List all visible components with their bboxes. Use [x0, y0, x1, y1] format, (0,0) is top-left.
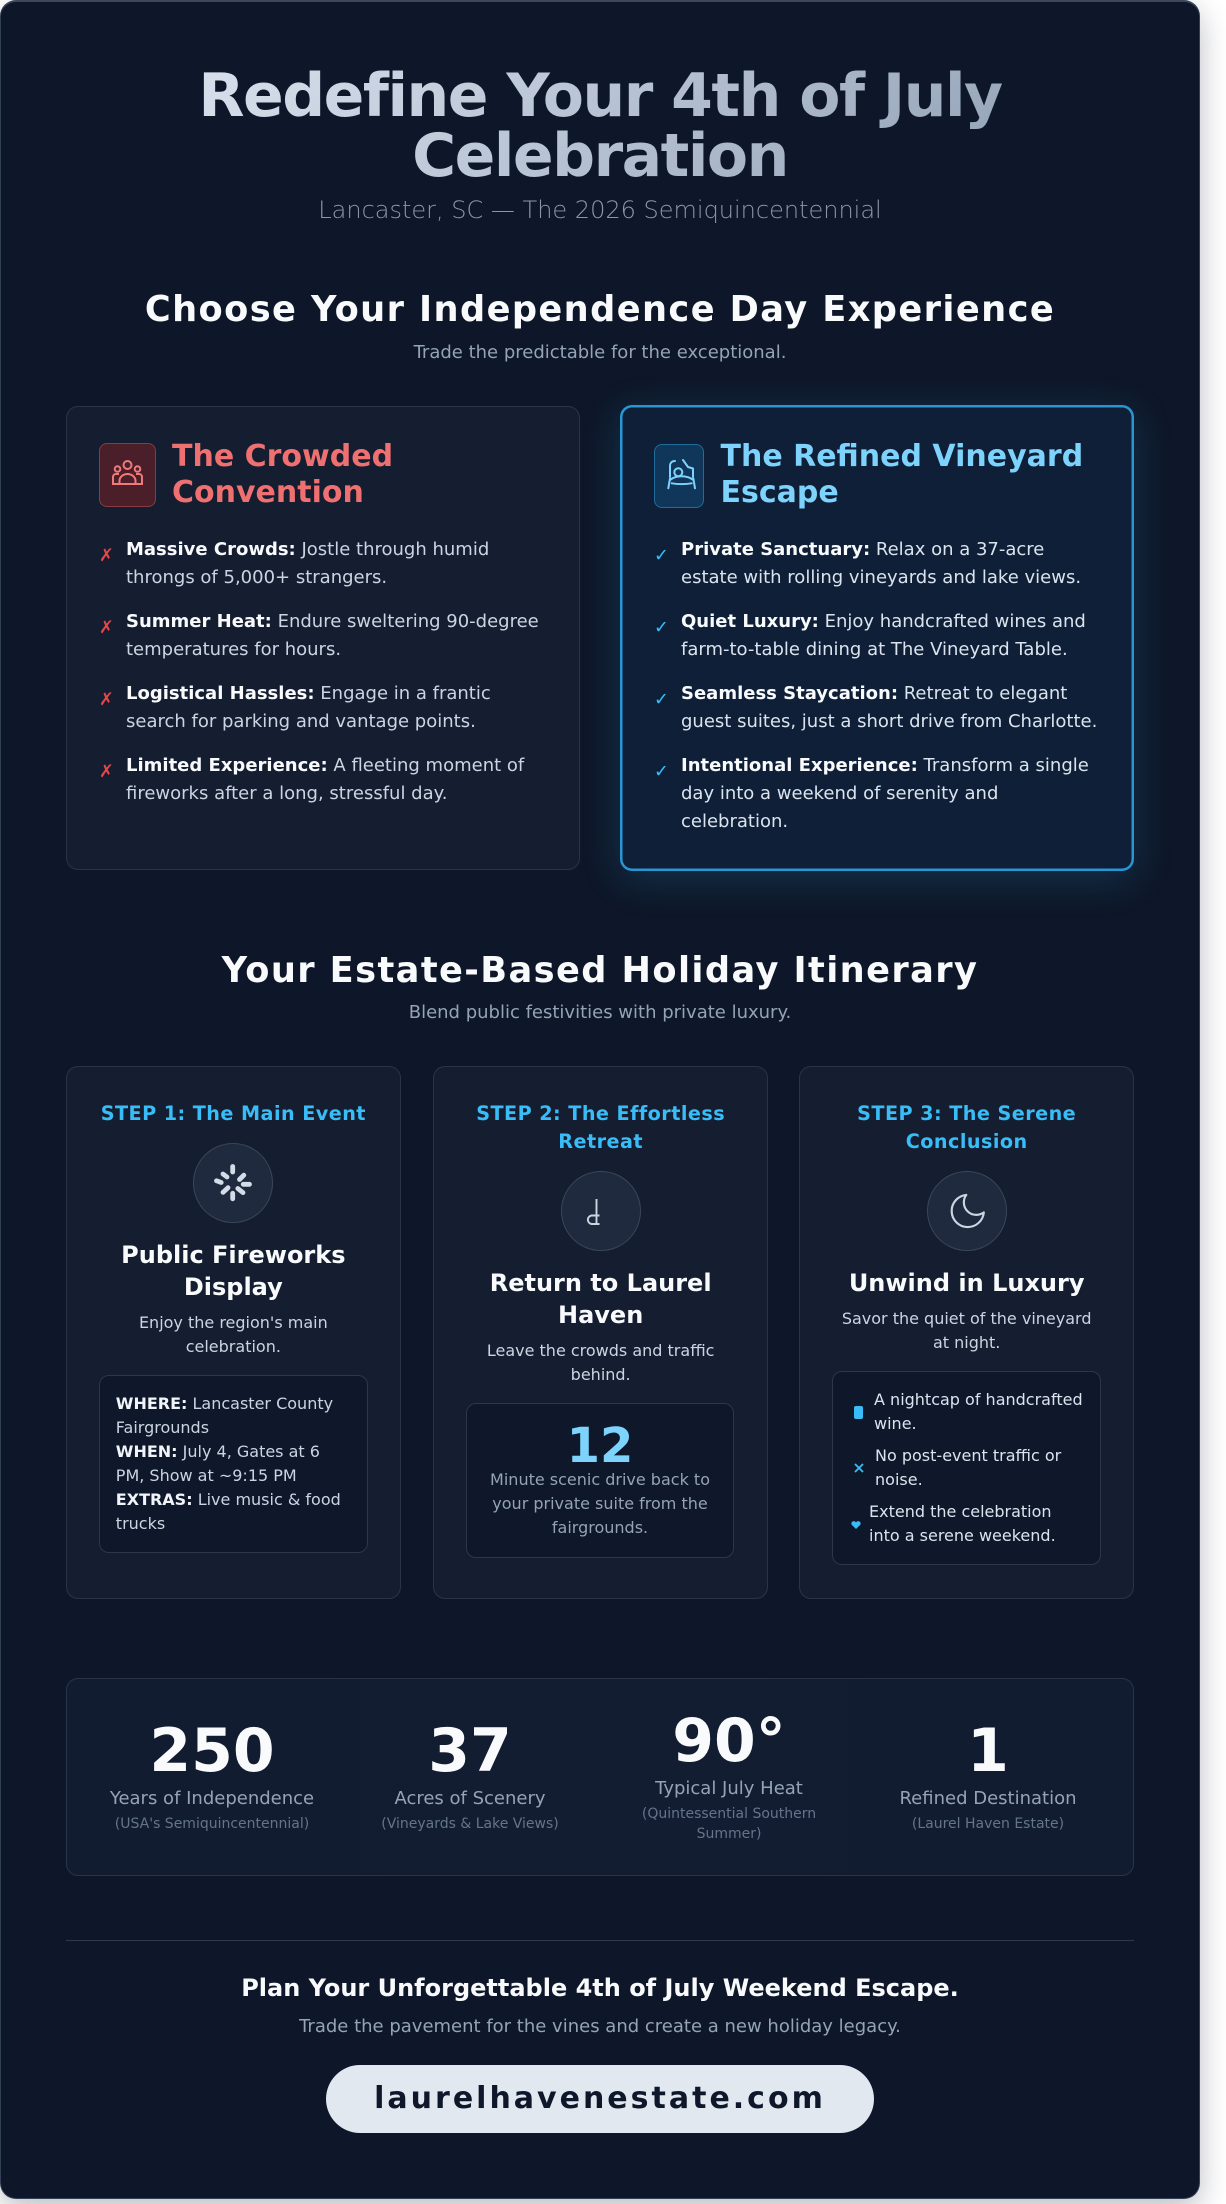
panel: refined vineyard escape — [620, 405, 1134, 871]
item: no traffic: noise. — [875, 1470, 923, 1489]
step 2 title: Return to Laurel — [490, 1269, 712, 1297]
step 3 label — [857, 1102, 1076, 1152]
heading: itinerary: Your Estate-Based Holiday Itinerary — [222, 950, 978, 991]
details text: PM, Show at ~9:15 PM — [116, 1466, 297, 1485]
stat: 12: 12 — [567, 1418, 633, 1474]
stat caption: fairgrounds. — [552, 1518, 648, 1537]
step 2 label: Retreat — [558, 1130, 643, 1152]
panel: step 1 — [66, 1066, 401, 1598]
step 2 description — [487, 1341, 714, 1384]
stat caption — [490, 1470, 710, 1537]
subheading: choose your experience: Trade the predictable for the exceptional. — [414, 342, 786, 363]
check marks — [654, 546, 669, 782]
heading: crowded convention: The Crowded — [172, 439, 393, 474]
stats panel — [66, 1678, 1134, 1876]
step 1 description — [139, 1313, 328, 1356]
step 2 title — [490, 1269, 712, 1329]
call to action heading: Plan Your Unforgettable 4th of July Weekend Escape. — [241, 1974, 959, 2002]
title: Redefine Your 4th of July — [198, 61, 1002, 131]
cross marks: ✗ — [99, 618, 114, 638]
step 2 stat box — [466, 1403, 734, 1558]
step 3 description — [842, 1308, 1091, 1352]
stats panel: Years of Independence — [110, 1788, 314, 1809]
details text: WHERE: Lancaster County — [116, 1394, 333, 1413]
subtitle: Lancaster, SC — The 2026 Semiquincentennial — [318, 196, 882, 224]
website pill — [326, 2065, 874, 2133]
item: no traffic — [875, 1446, 1062, 1489]
details text: EXTRAS: Live music & food — [116, 1490, 341, 1509]
check marks: ✓ — [654, 546, 669, 566]
step 1 title — [121, 1241, 346, 1301]
cross marks — [99, 546, 114, 782]
step 1 description: celebration. — [186, 1337, 281, 1356]
details text: Fairgrounds — [116, 1418, 209, 1437]
heading: refined vineyard escape: The Refined Vineyard — [720, 439, 1083, 474]
list item: summer heat — [126, 610, 539, 660]
list item: intentional experience: day into a weekend of serenity and — [681, 783, 998, 804]
step 3 list box — [832, 1371, 1101, 1565]
item: extend celebration: Extend the celebration — [869, 1502, 1052, 1521]
step 1 title: Display — [184, 1273, 283, 1301]
stats panel: Refined Destination — [899, 1788, 1077, 1809]
subheading: itinerary: Blend public festivities with private luxury. — [409, 1002, 791, 1022]
step 1 details box — [99, 1375, 368, 1552]
step 2 description: behind. — [571, 1365, 631, 1384]
list item: summer heat: Summer Heat: Endure sweltering 90-degree — [126, 610, 539, 632]
details text — [116, 1394, 341, 1533]
check marks: ✓ — [654, 762, 669, 782]
call to action subtext: Trade the pavement for the vines and create a new holiday legacy. — [299, 2016, 901, 2037]
step 3 description: Savor the quiet of the vineyard — [842, 1308, 1091, 1328]
details text: WHEN: July 4, Gates at 6 — [116, 1442, 320, 1461]
step 2 label — [476, 1102, 725, 1152]
icon: fireworks — [193, 1143, 273, 1223]
stats panel: Typical July Heat — [655, 1778, 803, 1799]
list item: private sanctuary — [681, 539, 1081, 588]
icon: heart — [851, 1521, 861, 1529]
step 3 label: Conclusion — [906, 1130, 1028, 1152]
stats panel: (Quintessential Southern — [642, 1806, 816, 1822]
step 2 description: Leave the crowds and traffic — [487, 1341, 714, 1360]
list item: limited experience: fireworks after a long, stressful day. — [126, 783, 447, 804]
step 1 title: Public Fireworks — [121, 1241, 346, 1269]
list item: summer heat: temperatures for hours. — [126, 639, 341, 660]
panel: step 3 — [799, 1066, 1134, 1598]
list item: massive crowds — [126, 538, 489, 588]
heading: crowded convention: Convention — [172, 475, 364, 510]
list item: seamless staycation: guest suites, just a short drive from Charlotte. — [681, 711, 1097, 732]
stat: 37 acres — [381, 1716, 559, 1832]
stat: 250 years — [110, 1716, 314, 1832]
title — [198, 61, 1002, 191]
stats panel: Summer) — [697, 1826, 761, 1842]
step 1 description: Enjoy the region's main — [139, 1313, 328, 1332]
stat caption: Minute scenic drive back to — [490, 1470, 710, 1489]
list item: quiet luxury: farm-to-table dining at The Vineyard Table. — [681, 639, 1068, 660]
icon: wine glyph — [854, 1406, 863, 1419]
list item: seamless staycation: Seamless Staycation: Retreat to elegant — [681, 683, 1067, 704]
list item: intentional experience: Intentional Experience: Transform a single — [681, 755, 1089, 776]
cross marks: ✗ — [99, 762, 114, 782]
check marks: ✓ — [654, 618, 669, 638]
step 3 title: Unwind in Luxury — [849, 1269, 1084, 1297]
cross marks: ✗ — [99, 690, 114, 710]
icon: armchair — [654, 444, 704, 508]
icon: crowd — [99, 443, 156, 507]
icon: no traffic cross — [854, 1463, 864, 1473]
list item: intentional experience: celebration. — [681, 811, 788, 832]
check marks: ✓ — [654, 690, 669, 710]
website pill: laurelhavenestate.com — [374, 2081, 826, 2116]
item: nightcap: wine. — [874, 1414, 917, 1433]
heading: choose your experience: Choose Your Independence Day Experience — [145, 289, 1055, 330]
list item: limited experience — [126, 754, 525, 804]
list item: private sanctuary: estate with rolling vineyards and lake views. — [681, 567, 1081, 588]
stats panel: Acres of Scenery — [394, 1788, 546, 1809]
stats panel: (Laurel Haven Estate) — [912, 1816, 1064, 1832]
heading: refined vineyard escape: Escape — [720, 475, 839, 510]
item: no traffic: No post-event traffic or — [875, 1446, 1061, 1465]
panel: crowded convention — [66, 406, 580, 870]
list item: logistical hassles: Logistical Hassles: Engage in a frantic — [126, 682, 491, 704]
stats panel: 37 — [428, 1716, 512, 1786]
stats panel: 1 — [967, 1716, 1009, 1786]
list item: logistical hassles: search for parking and vantage points. — [126, 711, 476, 732]
icon: moon — [927, 1171, 1007, 1251]
stats panel: (USA's Semiquincentennial) — [115, 1816, 309, 1832]
list item: massive crowds: Massive Crowds: Jostle through humid — [126, 538, 489, 560]
cross marks: ✗ — [99, 546, 114, 566]
list item: massive crowds: throngs of 5,000+ strangers. — [126, 567, 387, 588]
item: nightcap: A nightcap of handcrafted — [874, 1390, 1083, 1409]
heading: refined vineyard escape — [720, 439, 1083, 510]
list item: seamless staycation — [681, 683, 1097, 732]
item: nightcap — [874, 1390, 1083, 1433]
stats panel: 90° — [672, 1706, 786, 1776]
stat: 1 destination — [899, 1716, 1077, 1832]
panel: step 2 — [433, 1066, 768, 1598]
list item: limited experience: Limited Experience: A fleeting moment of — [126, 754, 524, 776]
list item: logistical hassles — [126, 682, 491, 732]
list item: intentional experience — [681, 755, 1089, 832]
step 3 label: STEP 3: The Serene — [857, 1102, 1076, 1124]
stats panel: 250 — [149, 1716, 275, 1786]
stat: 90 degrees — [642, 1706, 816, 1842]
heading: crowded convention — [172, 439, 393, 510]
title: Celebration — [412, 121, 788, 191]
list item: quiet luxury — [681, 611, 1086, 660]
item: extend celebration — [869, 1502, 1056, 1545]
item: extend celebration: into a serene weekend. — [869, 1526, 1056, 1545]
list item: quiet luxury: Quiet Luxury: Enjoy handcrafted wines and — [681, 611, 1086, 632]
step 3 description: at night. — [933, 1332, 1000, 1352]
step 2 label: STEP 2: The Effortless — [476, 1102, 725, 1124]
stats panel: (Vineyards & Lake Views) — [381, 1816, 559, 1832]
step 1 label: STEP 1: The Main Event — [101, 1102, 366, 1124]
step 2 title: Haven — [558, 1301, 643, 1329]
icon: key-like glyph — [561, 1171, 641, 1251]
stat caption: your private suite from the — [492, 1494, 708, 1513]
list item: private sanctuary: Private Sanctuary: Relax on a 37-acre — [681, 539, 1044, 560]
details text: trucks — [116, 1514, 165, 1533]
